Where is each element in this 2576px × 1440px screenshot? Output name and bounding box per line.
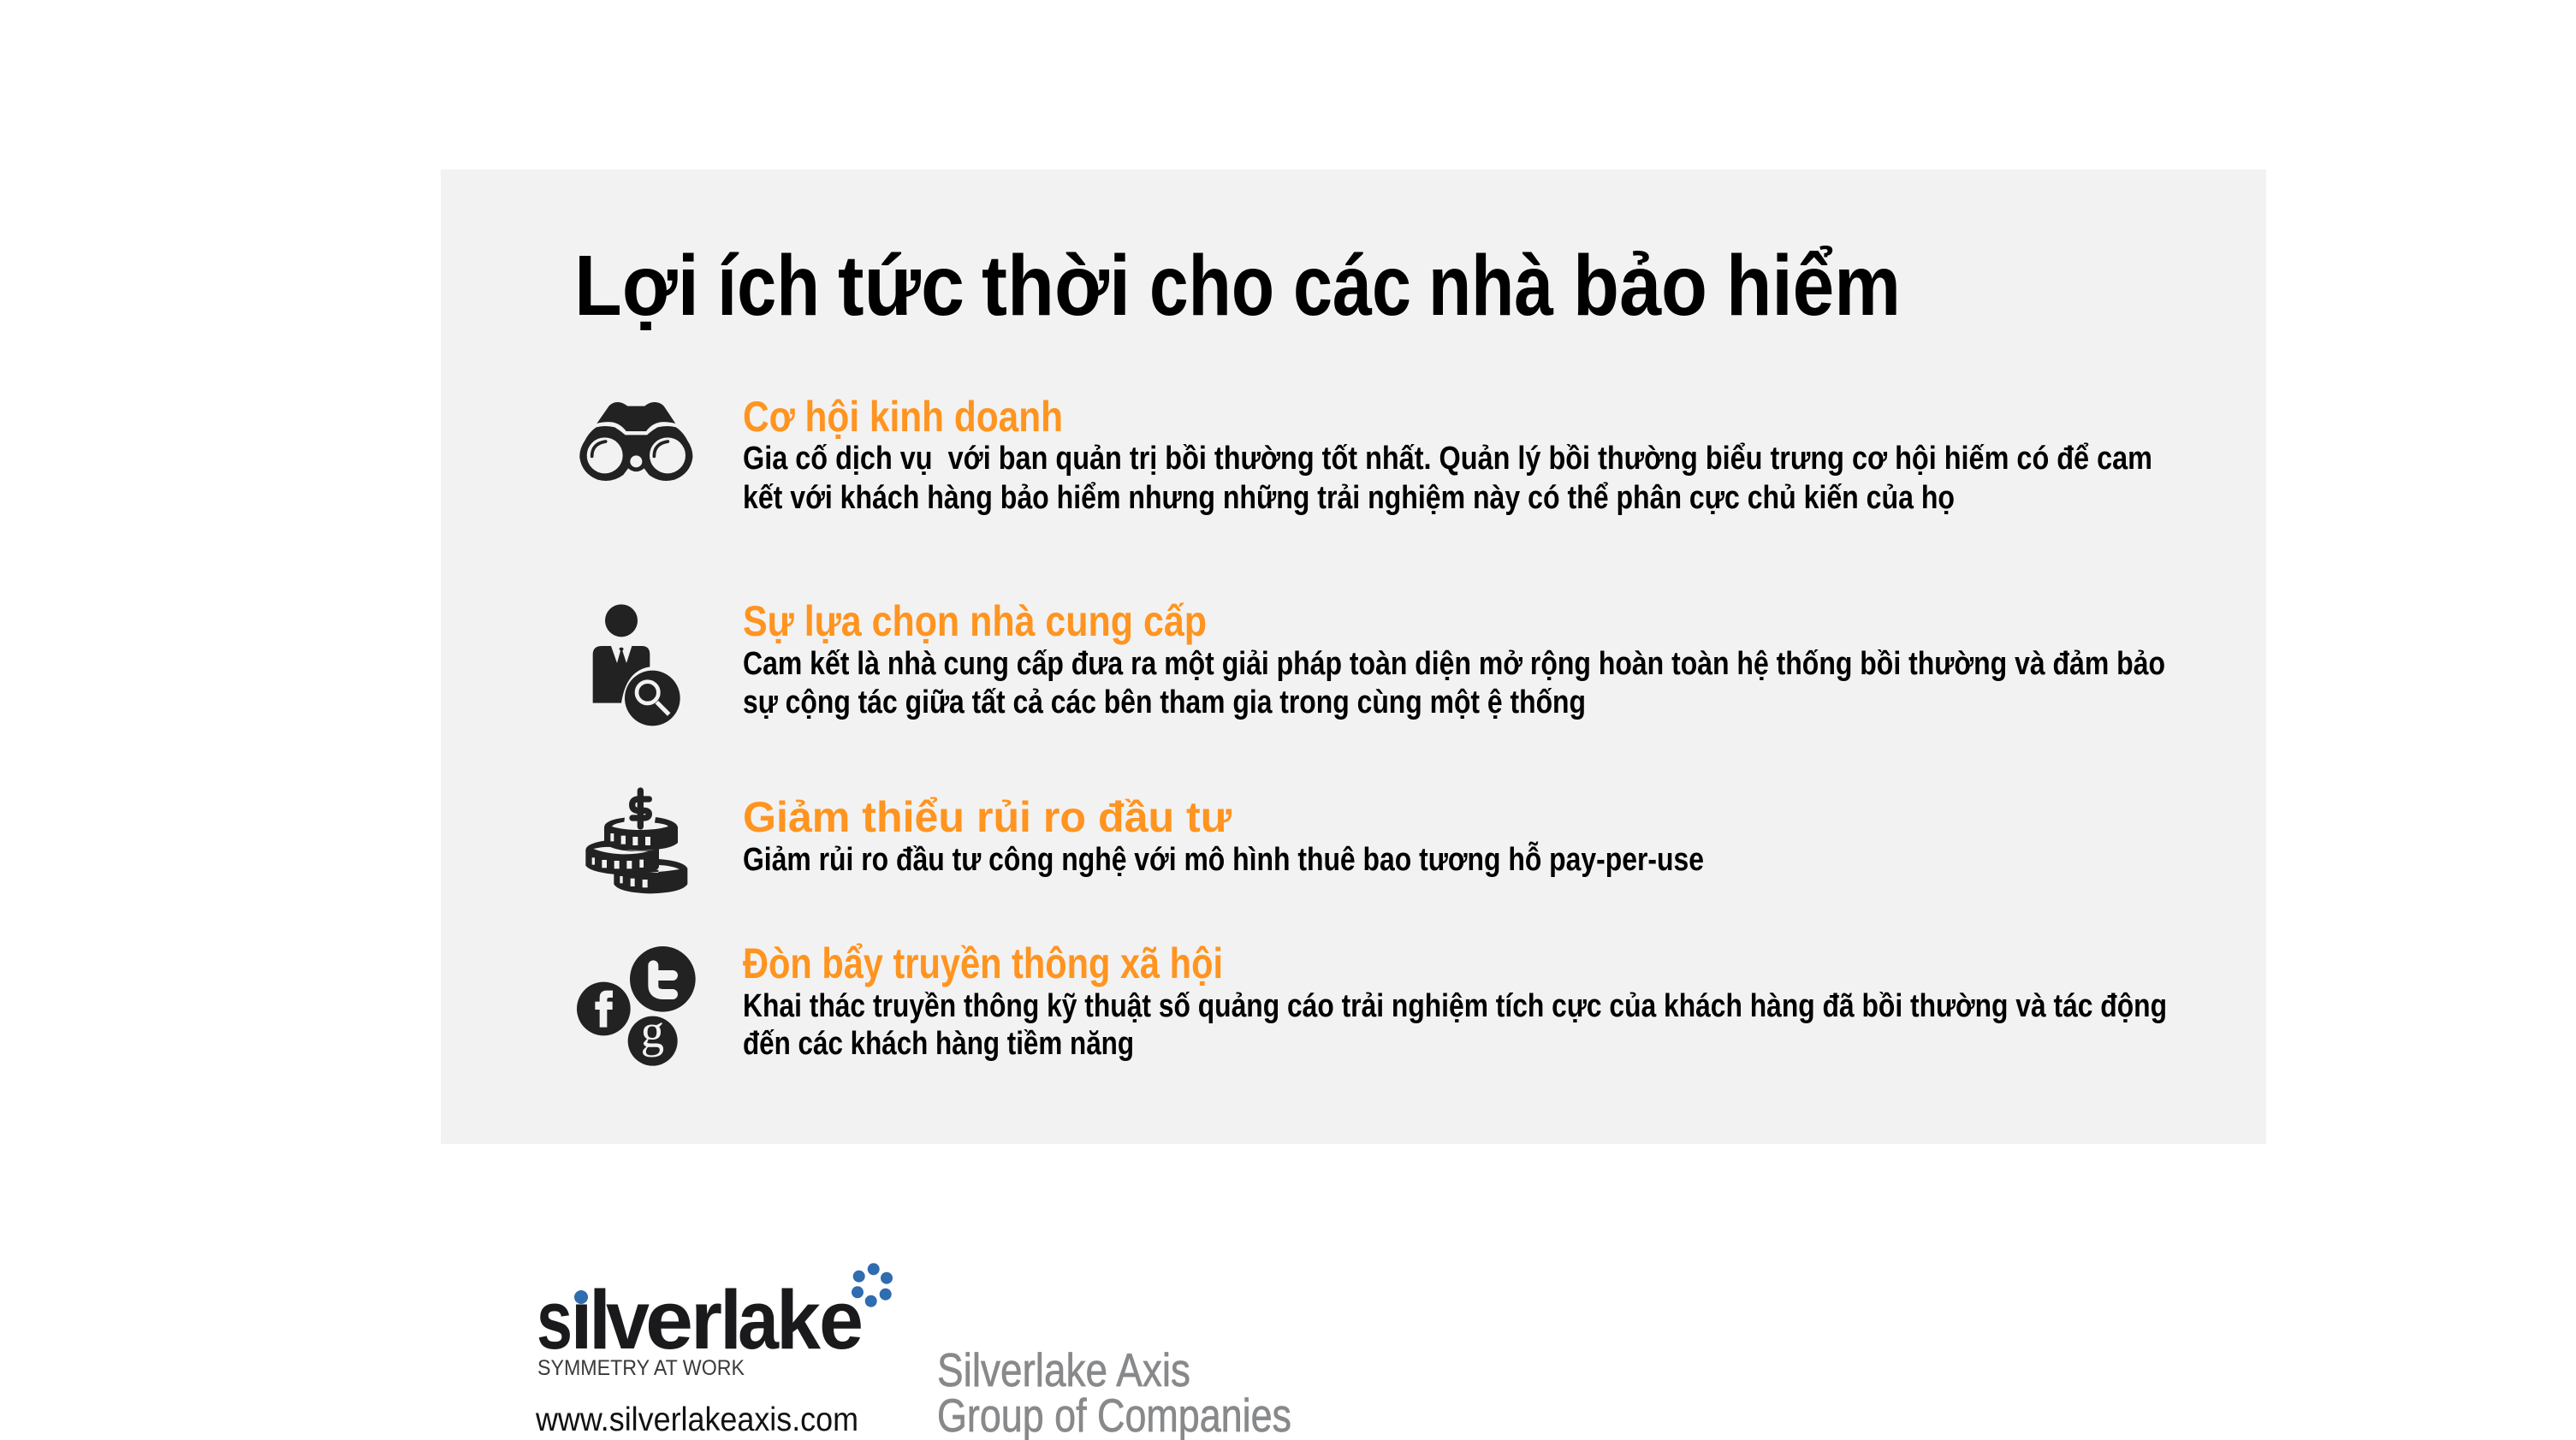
title: Lợi	[574, 238, 699, 334]
icon: person with magnifier	[593, 604, 680, 726]
logo tagline: SYMMETRY AT WORK	[537, 1356, 745, 1380]
body: investment risk: Giảm rủi ro đầu tư công nghệ với mô hình thuê bao tương hỗ pay-per-use	[743, 840, 1704, 878]
logo wordmark: a	[738, 1273, 780, 1366]
icon: social media: g	[641, 1005, 664, 1058]
logo: Silverlake	[537, 1263, 893, 1380]
body: social leverage: Khai thác truyền thông kỹ thuật số quảng cáo trải nghiệm tích cực của khách hàng đã bồi thường và tác động	[743, 988, 2167, 1024]
title: tức	[838, 238, 965, 334]
logo wordmark: e	[645, 1273, 693, 1366]
company group name: Silverlake Axis	[937, 1343, 1190, 1396]
text block: business opportunity	[743, 393, 2152, 516]
logo wordmark: s	[537, 1273, 573, 1366]
logo wordmark: r	[691, 1273, 722, 1366]
website url: www.silverlakeaxis.com	[535, 1401, 858, 1438]
icon: binoculars	[579, 402, 692, 481]
body: business opportunity	[743, 441, 2152, 516]
title: cho	[1149, 238, 1274, 334]
logo wordmark: l	[720, 1273, 742, 1366]
body: business opportunity: kết với khách hàng bảo hiểm nhưng những trải nghiệm này có thể phân cực chủ kiến của họ	[743, 480, 1955, 516]
company group name	[937, 1343, 1291, 1440]
logo wordmark: e	[819, 1273, 864, 1366]
logo wordmark: l	[589, 1273, 611, 1366]
body: vendor choice: Cam kết là nhà cung cấp đưa ra một giải pháp toàn diện mở rộng hoàn toàn hệ thống bồi thường và đảm bảo	[743, 646, 2165, 682]
body: social leverage: đến các khách hàng tiềm năng	[743, 1026, 1134, 1062]
logo wordmark: k	[776, 1273, 822, 1366]
panel: benefits background	[441, 169, 2266, 1144]
title: thời	[982, 238, 1131, 334]
text block: investment risk	[743, 793, 1704, 878]
title: các	[1293, 238, 1411, 334]
logo wordmark: i	[570, 1273, 592, 1366]
body: business opportunity: Gia cố dịch vụ với ban quản trị bồi thường tốt nhất. Quản lý bồi thường biểu trưng cơ hội hiếm có để cam	[743, 441, 2152, 477]
heading: social leverage: Đòn bẩy truyền thông xã hội	[743, 939, 1223, 987]
logo wordmark: v	[606, 1273, 650, 1366]
title: ích	[717, 238, 820, 334]
title: nhà	[1428, 238, 1553, 334]
body: vendor choice: sự cộng tác giữa tất cả các bên tham gia trong cùng một ệ thống	[743, 684, 1586, 720]
title: bảo	[1573, 238, 1707, 334]
body: social leverage	[743, 988, 2167, 1062]
text block: social leverage	[743, 939, 2167, 1062]
heading: investment risk: Giảm thiểu rủi ro đầu tư	[743, 793, 1232, 841]
icon: stack of coins	[585, 791, 687, 893]
heading: vendor choice: Sự lựa chọn nhà cung cấp	[743, 597, 1207, 645]
icon: social media	[577, 946, 696, 1066]
heading: business opportunity: Cơ hội kinh doanh	[743, 393, 1063, 441]
text block: vendor choice	[743, 597, 2165, 720]
body: vendor choice	[743, 646, 2165, 720]
logo dots	[573, 1263, 893, 1307]
title: hiểm	[1726, 238, 1901, 334]
